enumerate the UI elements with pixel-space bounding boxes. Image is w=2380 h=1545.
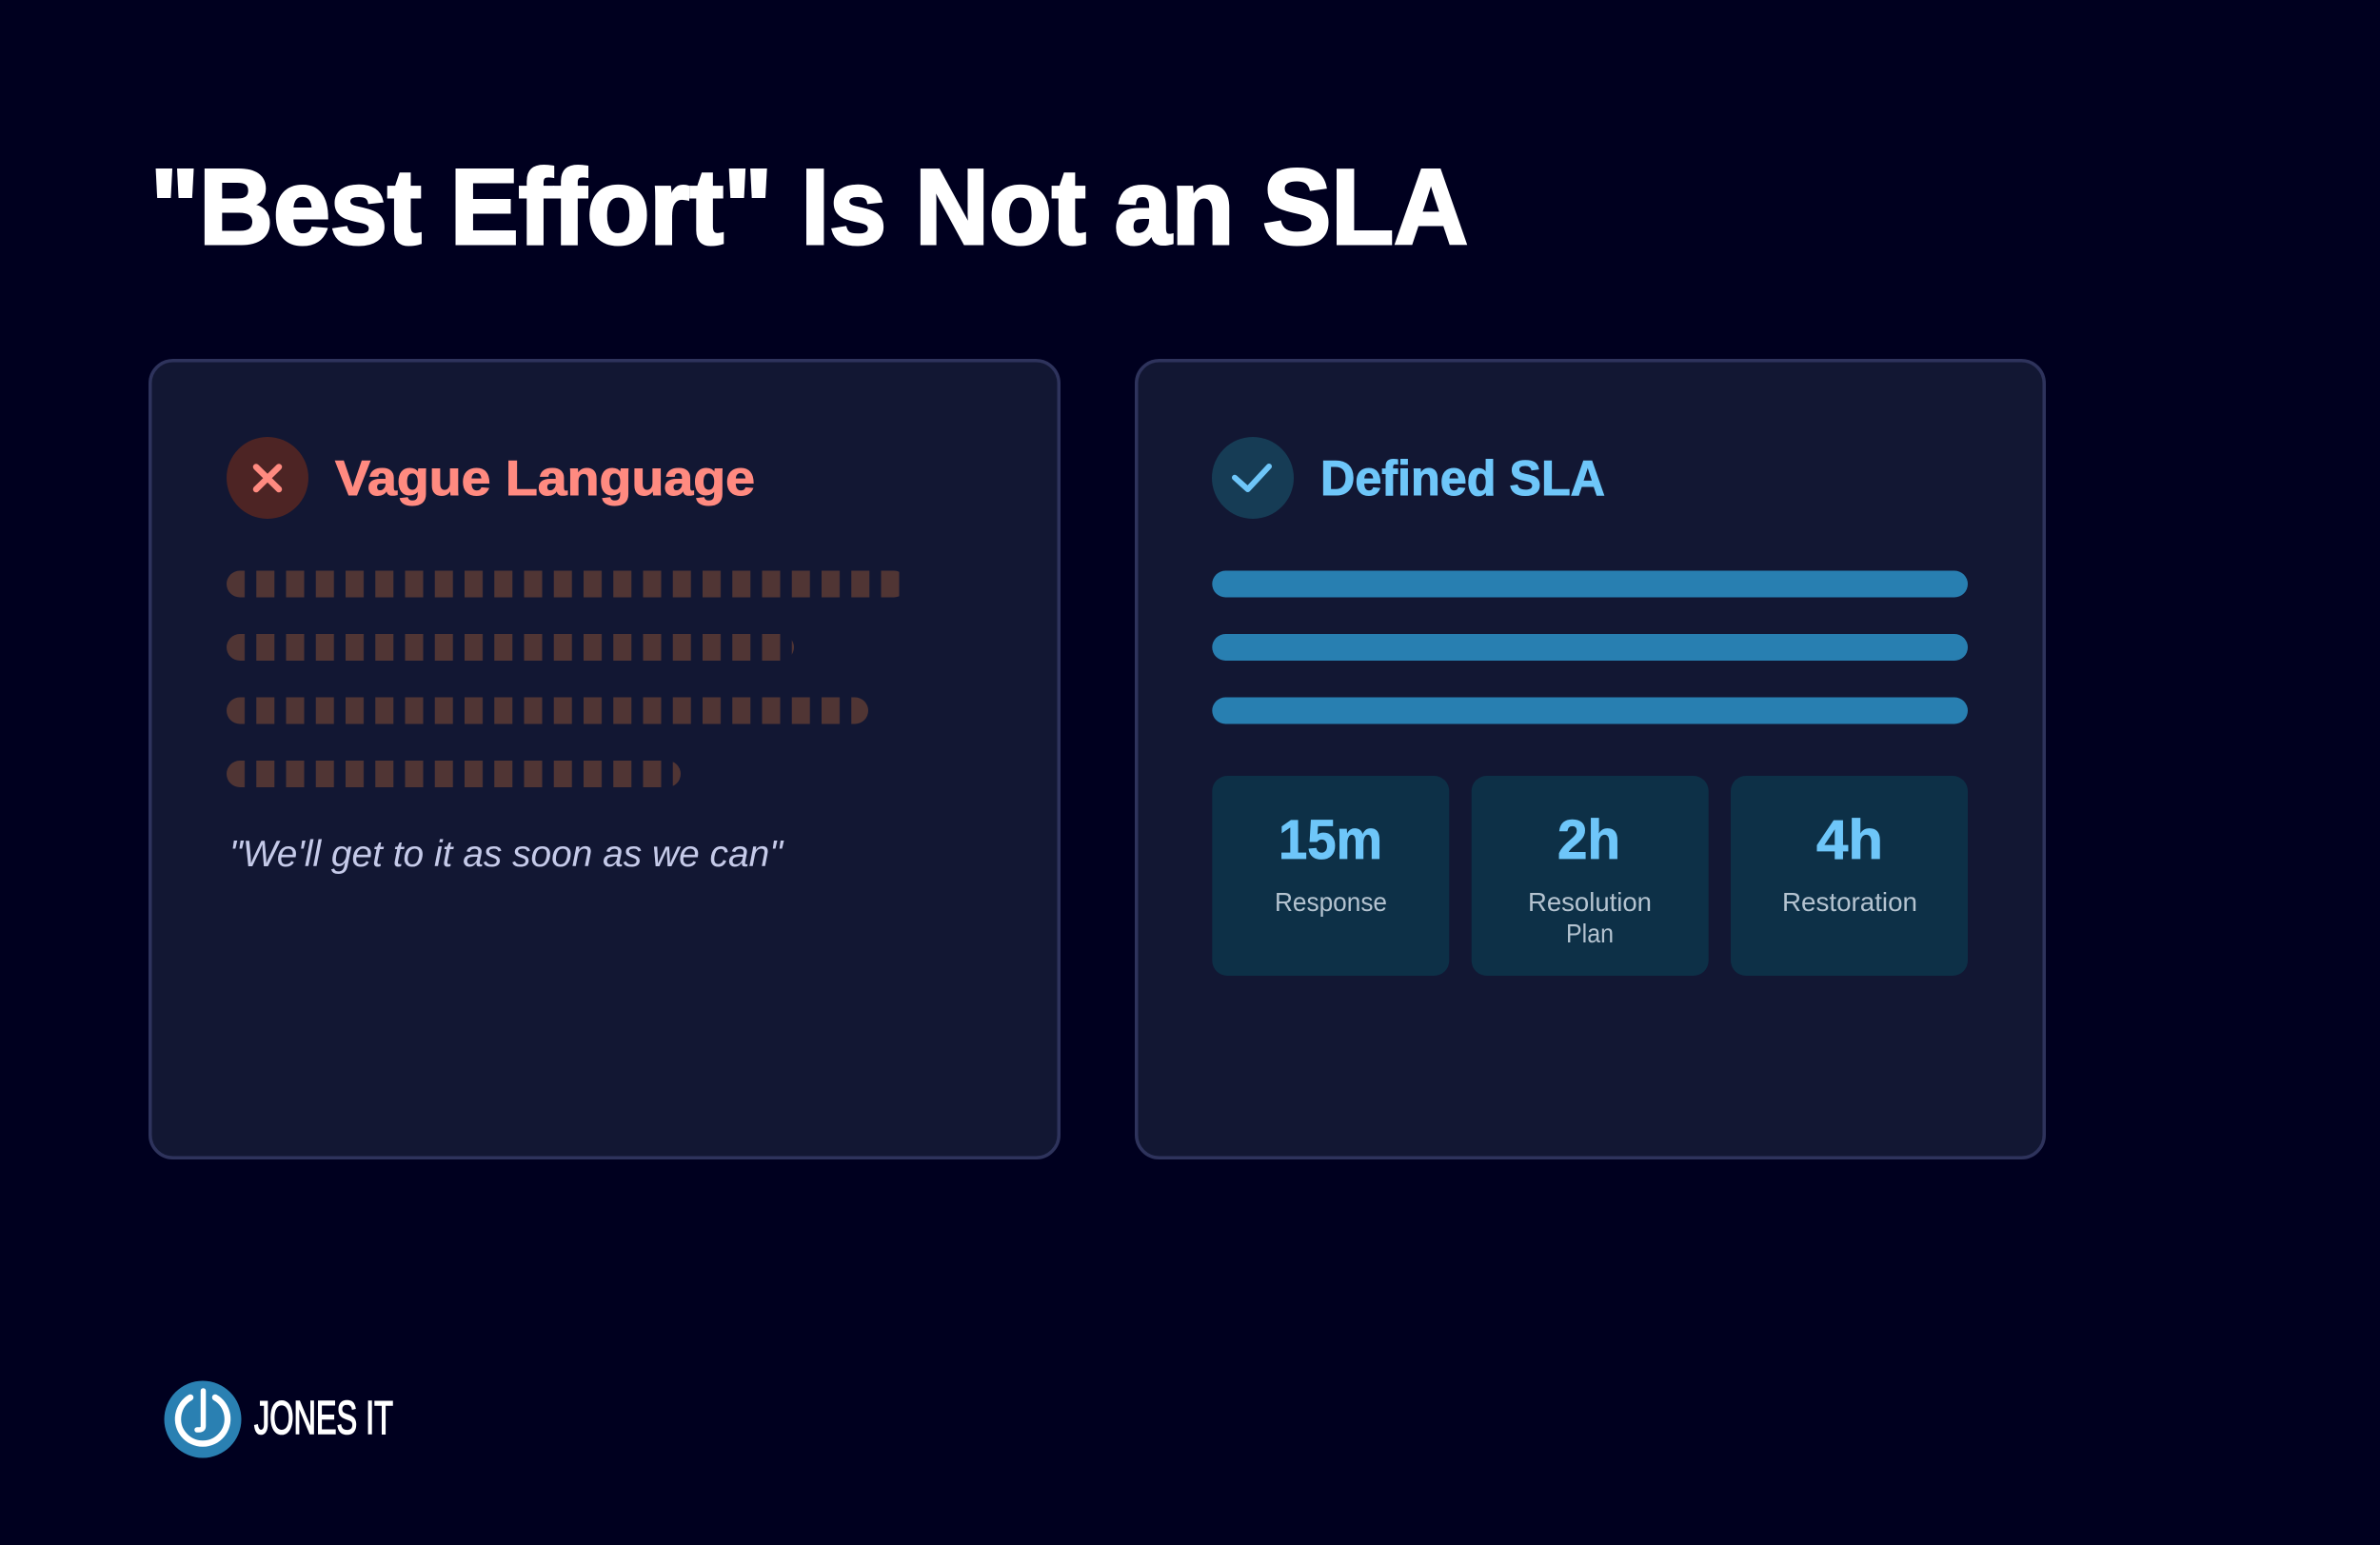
brand name: JONES IT [254, 1393, 393, 1444]
panel background [1137, 361, 2044, 1158]
metric: 4h restoration: Restoration [1782, 887, 1917, 917]
icon: blue check [1212, 437, 1294, 519]
icon: red cross [227, 437, 308, 519]
heading: defined SLA: Defined SLA [1320, 451, 1605, 506]
panel: defined SLA [1137, 361, 2044, 1158]
heading: vague language: Vague Language [335, 451, 755, 506]
panel background [150, 361, 1059, 1158]
metric: 2h resolution plan: Plan [1566, 919, 1614, 948]
metric: 2h resolution plan [1472, 776, 1709, 976]
panel: vague language [150, 361, 1059, 1158]
logo: Jones IT [164, 1380, 393, 1458]
quote: "We'll get to it as soon as we can" [229, 834, 784, 875]
metric: 15m response: Response [1275, 887, 1387, 917]
metric: 15m response: 15m [1279, 809, 1382, 871]
icon: power button [164, 1380, 242, 1458]
title: "Best Effort" Is Not an SLA [150, 148, 1468, 267]
metric: 15m response [1212, 776, 1449, 976]
metric: 4h restoration [1731, 776, 1968, 976]
metric: 4h restoration: 4h [1816, 809, 1883, 871]
metric: 2h resolution plan: 2h [1557, 809, 1620, 871]
dashed text placeholder lines [227, 571, 907, 787]
solid text placeholder lines [1212, 571, 1968, 723]
metric: 2h resolution plan: Resolution [1528, 887, 1652, 917]
